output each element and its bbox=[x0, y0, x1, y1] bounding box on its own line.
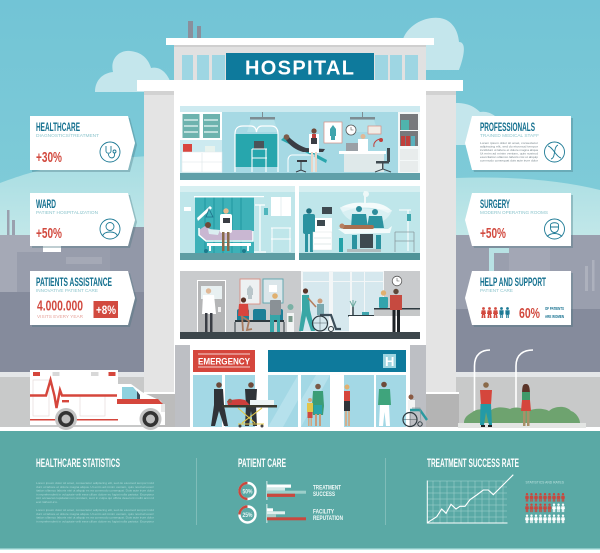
floor 2 right: operating room bbox=[299, 186, 420, 260]
bar labels: TREATMENT bbox=[313, 484, 341, 492]
desk with seated doctor bbox=[339, 134, 386, 172]
lorem text bbox=[480, 141, 539, 162]
ground floor: columns and annex bbox=[144, 345, 459, 427]
door bbox=[197, 280, 226, 332]
family in entrance bbox=[307, 384, 324, 426]
doctor bbox=[309, 128, 319, 172]
people icons bbox=[481, 307, 510, 318]
statistics and rates pictogram: STATISTICS AND RATES bbox=[526, 480, 564, 484]
ceiling lamps bbox=[247, 112, 378, 132]
card: help and support bbox=[465, 271, 573, 327]
card: ward: PATIENT HOSPITALIZATION bbox=[36, 210, 99, 216]
body copy: Lorem ipsum dolor sit amet, consectetur adipiscing elit, sed do eiusmod tempor incid bbox=[36, 508, 154, 512]
seated woman bbox=[238, 297, 252, 331]
city skyline bbox=[0, 210, 600, 374]
donut 25%: 25% bbox=[242, 512, 253, 519]
card: healthcare bbox=[30, 116, 137, 172]
receptionist bbox=[379, 290, 388, 308]
windows bbox=[303, 272, 383, 331]
surgical light bbox=[340, 191, 392, 225]
dental chair with patient bbox=[281, 134, 327, 172]
bar labels: SUCCESS bbox=[313, 491, 335, 498]
statistics and rates pictogram bbox=[525, 480, 565, 523]
entrance windows bbox=[193, 375, 406, 427]
lorem text: adipiscing elit, sed do eiusmod tempor bbox=[480, 144, 538, 148]
floor 3: waiting room and reception bbox=[180, 271, 420, 339]
body copy: Lorem ipsum dolor sit amet, consectetur adipiscing elit, sed do eiusmod tempor incid bbox=[36, 481, 154, 485]
curtain bbox=[235, 126, 278, 172]
wall socket panel bbox=[184, 207, 191, 211]
body copy: sint occaecat cupidatat non proident, sunt in culpa qui officia deserunt mollit anim id bbox=[36, 496, 154, 500]
lorem text: commodo consequat duis aute irure dolor bbox=[480, 158, 538, 162]
card: ward: +50% bbox=[36, 226, 62, 242]
body copy: in reprehenderit in voluptate velit esse cillum dolore eu fugiat nulla pariatur. Excepteur bbox=[36, 519, 154, 523]
side table bbox=[271, 228, 291, 252]
icon: surgeon bbox=[544, 219, 564, 239]
woman on street bbox=[521, 384, 531, 426]
wall chart bbox=[324, 122, 342, 143]
card: patients assistance: INNOVATIVE PATIENT CARE bbox=[36, 288, 98, 294]
lorem text: Lorem ipsum dolor sit amet, consectetur bbox=[480, 141, 538, 145]
badge: +8% bbox=[96, 305, 116, 317]
picture frame bbox=[368, 126, 381, 134]
wall clock bbox=[346, 125, 356, 135]
visitor in red bbox=[390, 289, 402, 332]
surgeons bbox=[351, 206, 384, 252]
clouds bbox=[95, 18, 507, 145]
card: help and support: 60% bbox=[519, 306, 540, 322]
bars treatment success bbox=[266, 481, 306, 500]
body copy: in reprehenderit in voluptate velit esse cillum dolore eu fugiat nulla pariatur. Excepteur bbox=[36, 492, 154, 496]
sky background bbox=[0, 0, 600, 240]
doctor at door bbox=[202, 288, 216, 332]
lorem text: Ut enim ad minim veniam, quis nostrud bbox=[480, 152, 539, 156]
seated man bbox=[270, 293, 281, 332]
card: help and support: PATIENT CARE bbox=[480, 288, 513, 294]
card: surgery: +50% bbox=[480, 226, 506, 242]
circulating nurse bbox=[303, 208, 315, 252]
street wall and pavement bbox=[0, 372, 600, 432]
nurse bbox=[220, 208, 232, 251]
building body bbox=[137, 80, 463, 431]
bed curtain bbox=[194, 196, 264, 253]
bar labels bbox=[313, 484, 343, 522]
card: professionals: PROFESSIONALS bbox=[480, 122, 535, 134]
reception plant bbox=[350, 300, 356, 316]
bars facility reputation bbox=[266, 504, 306, 523]
office chair bbox=[375, 148, 391, 172]
body copy: dunt ut labore et dolore magna aliqua. Ut enim ad minim veniam, quis nostrud exerc bbox=[36, 485, 155, 489]
row 3 bbox=[525, 514, 565, 523]
axes bbox=[427, 480, 508, 523]
icon: doctor bbox=[100, 219, 120, 239]
card: surgery: MODERN OPERATING ROOMS bbox=[480, 210, 548, 216]
lorem text: incididunt ut labore et dolore magna aliqua bbox=[480, 148, 538, 152]
card: patients assistance: VISITS EVERY YEAR bbox=[37, 314, 84, 319]
man in green bbox=[378, 382, 391, 426]
posters bbox=[240, 279, 283, 304]
icon: stethoscope bbox=[100, 142, 120, 162]
emergency sign: EMERGENCY bbox=[198, 356, 251, 368]
entrance banner with H icon bbox=[268, 350, 406, 372]
monitor cart bbox=[313, 207, 332, 250]
card: professionals bbox=[465, 116, 573, 172]
card: professionals: TRAINED MEDICAL STAFF bbox=[480, 133, 539, 139]
IV pole and shelf bbox=[395, 210, 414, 252]
man on street bbox=[480, 382, 492, 427]
wheelchair with patient bbox=[312, 298, 341, 332]
card: help and support: ARE WOMEN bbox=[545, 314, 564, 319]
light hill horizon bbox=[0, 154, 600, 240]
street lamps bbox=[474, 350, 533, 411]
body copy: dunt ut labore et dolore magna aliqua. Ut enim ad minim veniam, quis nostrud exerc bbox=[36, 512, 155, 516]
card: patients assistance: PATIENTS ASSISTANCE bbox=[36, 277, 112, 289]
hospital sign: HOSPITAL bbox=[245, 58, 354, 80]
bar labels: REPUTATION bbox=[313, 515, 343, 522]
patient care chart bbox=[238, 458, 343, 523]
person in wheelchair bbox=[403, 394, 427, 426]
icon: dna bbox=[544, 142, 564, 162]
ambulance bbox=[30, 370, 165, 430]
oxygen tank bbox=[339, 238, 343, 252]
paramedics with stretcher bbox=[211, 382, 277, 428]
card: healthcare: HEALTHCARE bbox=[36, 122, 80, 134]
reception desk bbox=[348, 271, 420, 332]
lorem text: exercitation ullamco laboris nisi ut aliquip bbox=[480, 155, 538, 159]
card: healthcare: DIAGNOSTICS/TREATMENT bbox=[36, 133, 99, 139]
hospital sign bbox=[226, 53, 374, 81]
woman at door bbox=[344, 384, 350, 426]
patient care chart: PATIENT CARE bbox=[238, 458, 286, 470]
plant stand bbox=[287, 304, 294, 332]
trend line bbox=[427, 475, 513, 523]
body copy bbox=[36, 481, 155, 523]
wall cabinet bbox=[271, 197, 291, 216]
entrance banner with H icon: H bbox=[385, 354, 394, 369]
card: ward bbox=[30, 193, 137, 248]
card: surgery bbox=[465, 193, 573, 248]
bar labels: FACILITY bbox=[313, 508, 334, 516]
card: help and support: OF PATIENTS bbox=[545, 306, 564, 311]
body copy: itation ullamco laboris nisi ut aliquip ex ea commodo consequat. Duis aute irure dolor bbox=[36, 516, 154, 520]
treatment success rate chart bbox=[427, 458, 519, 523]
waiting bench bbox=[235, 309, 284, 332]
medicine cabinets bbox=[180, 112, 222, 172]
shelves bbox=[400, 114, 418, 172]
healthcare statistics text: HEALTHCARE STATISTICS bbox=[36, 458, 120, 470]
reception clock bbox=[392, 276, 402, 286]
body copy: itation ullamco laboris nisi ut aliquip ex ea commodo consequat. Duis aute irure dolor bbox=[36, 489, 154, 493]
body copy: est laborum. bbox=[36, 500, 58, 504]
treatment success rate chart: TREATMENT SUCCESS RATE bbox=[427, 458, 519, 470]
row 2 bbox=[525, 504, 565, 512]
card: surgery: SURGERY bbox=[480, 199, 510, 211]
ambulance wheels bbox=[55, 408, 162, 430]
floor 1: clinic room bbox=[180, 106, 420, 180]
row 1 bbox=[525, 493, 565, 502]
card: patients assistance: 4.000.000 bbox=[37, 298, 83, 314]
card: ward: WARD bbox=[36, 199, 56, 211]
card: help and support: HELP AND SUPPORT bbox=[480, 277, 546, 289]
IV pole bbox=[254, 205, 268, 252]
floor 2 left: ward room bbox=[180, 186, 295, 260]
card: healthcare: +30% bbox=[36, 150, 62, 166]
healthcare statistics text bbox=[36, 458, 155, 523]
bottom statistics panel bbox=[0, 431, 600, 550]
patient bed bbox=[197, 206, 253, 253]
medical trolley bbox=[252, 141, 267, 172]
building: roof level bbox=[166, 21, 434, 81]
card: patients assistance bbox=[30, 271, 137, 327]
operating table with patient bbox=[338, 224, 392, 252]
donut 50%: 50% bbox=[242, 488, 253, 496]
emergency sign bbox=[193, 350, 255, 372]
nurse pushing wheelchair bbox=[299, 288, 316, 331]
bushes and sidewalk bbox=[458, 407, 586, 428]
grid bbox=[427, 481, 507, 523]
